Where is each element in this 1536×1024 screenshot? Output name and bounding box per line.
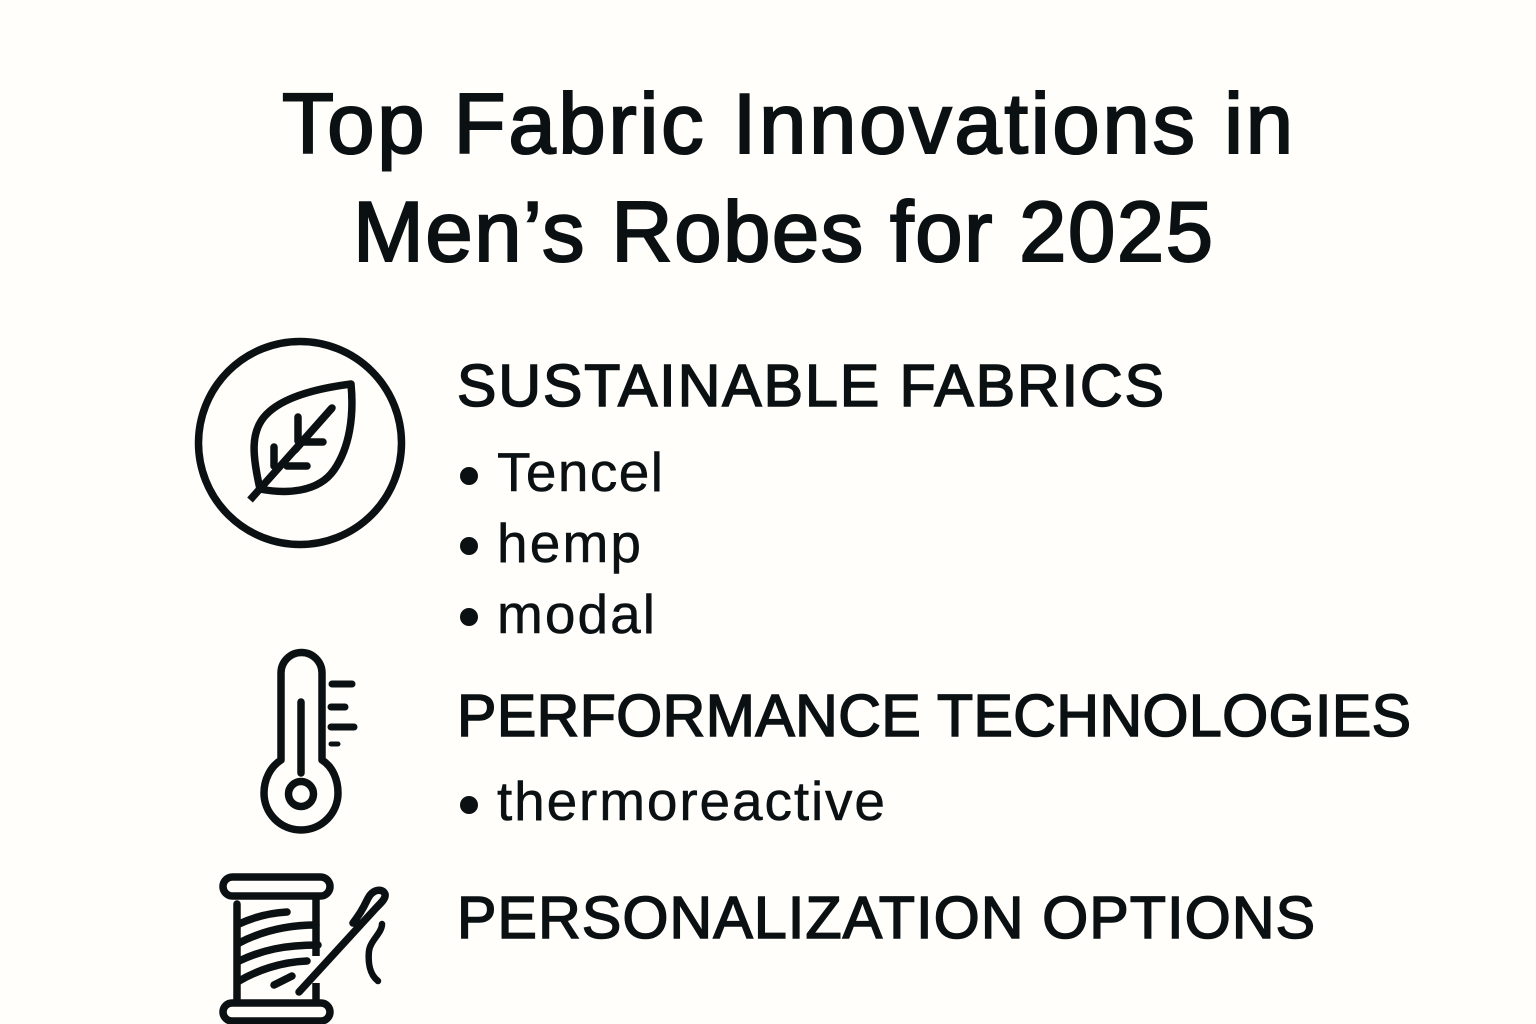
icon: leaf in circle bbox=[198, 342, 402, 544]
heading: sustainable fabrics: SUSTAINABLE FABRICS bbox=[457, 353, 1164, 419]
list: sustainable fabrics: hemp bbox=[497, 512, 641, 574]
list: performance technologies: thermoreactive bbox=[497, 770, 885, 832]
heading: performance technologies: PERFORMANCE TECHNOLOGIES bbox=[457, 683, 1411, 749]
icon: thermometer bbox=[264, 652, 354, 830]
title: Top Fabric Innovations in bbox=[282, 77, 1293, 172]
icon: thread spool and needle bbox=[223, 877, 385, 1021]
title bbox=[282, 77, 1293, 280]
list: sustainable fabrics bbox=[460, 441, 663, 645]
title: Men’s Robes for 2025 bbox=[353, 185, 1213, 280]
heading: personalization options: PERSONALIZATION OPTIONS bbox=[457, 885, 1315, 951]
list: sustainable fabrics: Tencel bbox=[497, 441, 663, 503]
list: sustainable fabrics: modal bbox=[497, 583, 655, 645]
